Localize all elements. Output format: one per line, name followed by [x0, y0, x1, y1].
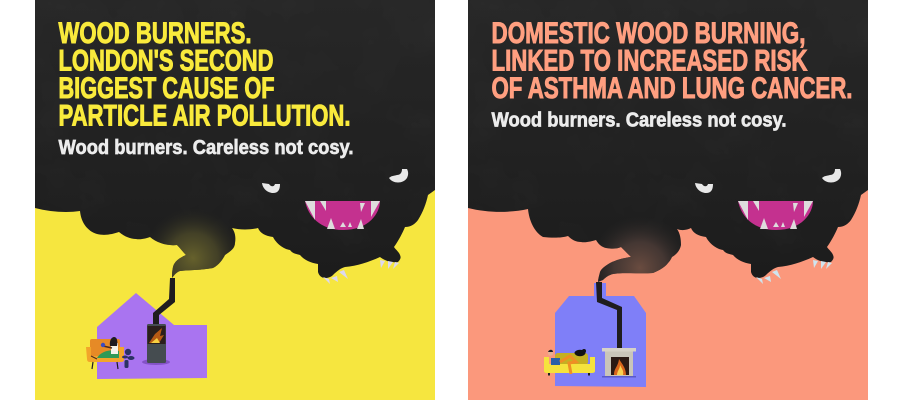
wood stove — [147, 324, 166, 363]
monster eyes — [695, 169, 841, 193]
house: purple — [97, 293, 207, 379]
panel background: salmon — [468, 0, 868, 400]
monster mouth — [305, 201, 380, 230]
panel: wood burner poster — [35, 0, 435, 400]
panel: domestic fireplace poster — [468, 0, 868, 400]
headline — [58, 17, 350, 133]
house: periwinkle — [555, 283, 646, 387]
headline — [492, 17, 852, 105]
sofa with person and cat — [544, 349, 595, 376]
headline: LINKED TO INCREASED RISK — [492, 44, 808, 78]
flue pipe — [596, 282, 622, 348]
headline: BIGGEST CAUSE OF — [58, 72, 274, 105]
headline: LONDON'S SECOND — [58, 44, 274, 78]
monster mouth — [738, 201, 813, 230]
panel background: yellow — [35, 0, 435, 400]
plant — [122, 349, 134, 368]
tagline: Wood burners. Careless not cosy. — [492, 108, 786, 132]
sofa with person — [86, 337, 124, 369]
monster claws — [756, 260, 832, 284]
headline: DOMESTIC WOOD BURNING, — [492, 17, 806, 50]
headline: PARTICLE AIR POLLUTION. — [58, 100, 350, 133]
tagline: Wood burners. Careless not cosy. — [58, 136, 354, 159]
monster eyes — [262, 169, 408, 193]
stove shadow — [142, 359, 170, 365]
headline: WOOD BURNERS. — [58, 17, 252, 50]
smoke cloud monster body — [468, 0, 868, 282]
flue pipe — [153, 278, 175, 324]
fireplace — [602, 348, 636, 378]
monster claws — [323, 260, 399, 284]
smoke cloud monster body — [35, 0, 435, 308]
